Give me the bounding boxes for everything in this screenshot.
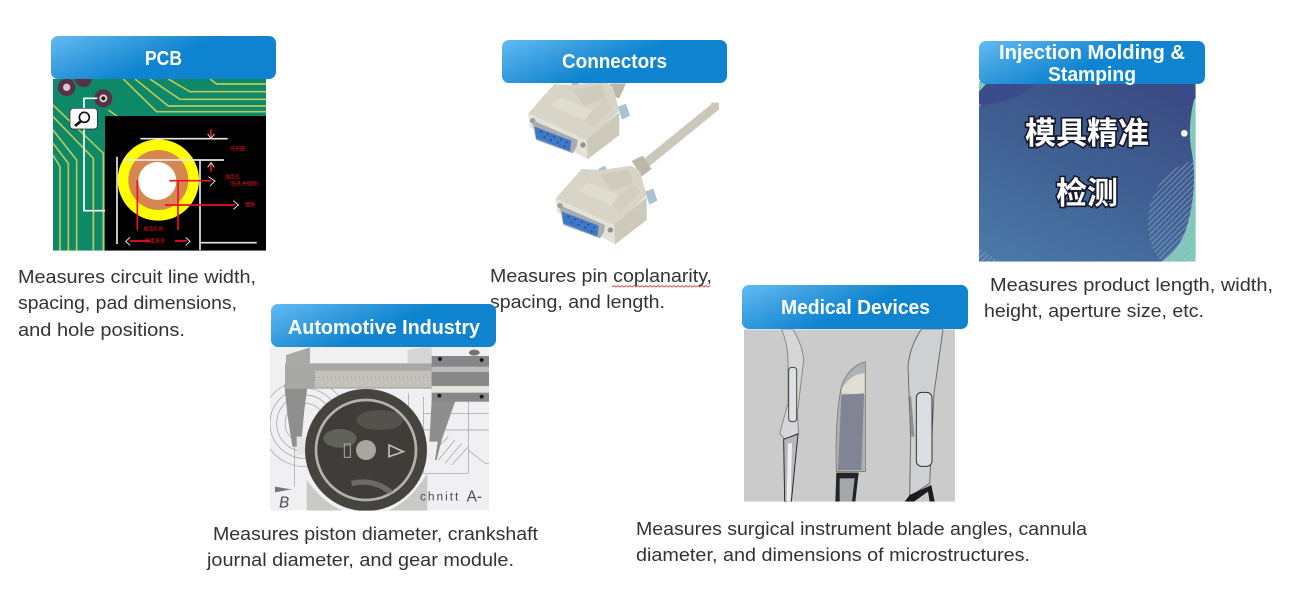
image: D-sub connector cable — [528, 81, 719, 244]
image: caliper measuring piston: B — [279, 494, 289, 511]
image: PCB pad diagram: 成品孔 — [225, 174, 240, 181]
image: mold inspection poster — [978, 82, 1196, 262]
image: caliper measuring piston: chnitt — [420, 490, 459, 504]
text: Injection Molding description — [984, 274, 1273, 321]
text: Connectors description — [490, 265, 712, 312]
text: Connectors description: spacing, and length. — [490, 291, 665, 312]
image: PCB pad diagram: 镀铜 — [245, 201, 255, 208]
heading: Injection Molding & Stamping — [979, 41, 1205, 86]
text: Medical Devices description: diameter, and dimensions of microstructures. — [636, 544, 1030, 565]
heading: Injection Molding & Stamping: Stamping — [1048, 64, 1136, 86]
text: PCB description — [18, 266, 256, 340]
text: PCB description: and hole positions. — [18, 319, 185, 340]
text: Medical Devices description: Measures surgical instrument blade angles, cannula — [636, 518, 1088, 539]
image: caliper measuring piston — [262, 347, 489, 515]
text: Injection Molding description: height, aperture size, etc. — [984, 300, 1204, 321]
text: Injection Molding description: Measures product length, width, — [990, 274, 1273, 295]
image: surgical scalpel blades — [744, 329, 955, 502]
text: poster title: 模具精准 — [1025, 116, 1149, 151]
heading: Connectors — [502, 40, 727, 83]
heading: Medical Devices — [742, 285, 968, 329]
text: Automotive description: journal diameter, and gear module. — [206, 549, 514, 570]
heading: Medical Devices: Medical Devices — [781, 297, 930, 319]
text: PCB description: spacing, pad dimensions, — [18, 292, 237, 313]
image: PCB pad diagram: （钻孔并镀铜） — [227, 181, 262, 188]
image: PCB pad diagram: 环形圈 — [230, 145, 245, 152]
heading: Injection Molding & Stamping: Injection Molding & — [999, 42, 1185, 64]
image: PCB pad diagram: 成品孔径 — [143, 225, 163, 232]
text: Medical Devices description — [636, 518, 1088, 565]
text: Connectors description: Measures pin coplanarity, — [490, 265, 712, 286]
heading: Automotive Industry — [271, 304, 496, 347]
heading: Connectors: Connectors — [562, 51, 667, 73]
heading: Automotive Industry: Automotive Industry — [288, 317, 481, 339]
text: Automotive description: Measures piston diameter, crankshaft — [213, 523, 538, 544]
text: Automotive description — [206, 523, 538, 570]
text: poster title — [1025, 116, 1149, 211]
heading: PCB: PCB — [145, 48, 182, 70]
panel: Automotive Industry — [206, 304, 538, 570]
image: caliper measuring piston: A- — [467, 489, 482, 506]
panel: Injection Molding & Stamping — [978, 41, 1273, 321]
panel: Medical Devices — [636, 285, 1088, 565]
image: PCB pad diagram — [53, 70, 266, 251]
image: PCB pad diagram: 焊盘直径 — [145, 238, 165, 245]
panel: PCB — [18, 36, 276, 340]
heading: PCB — [51, 36, 276, 79]
text: PCB description: Measures circuit line width, — [18, 266, 256, 287]
panel: Connectors — [490, 40, 727, 312]
text: poster title: 检测 — [1056, 176, 1118, 211]
